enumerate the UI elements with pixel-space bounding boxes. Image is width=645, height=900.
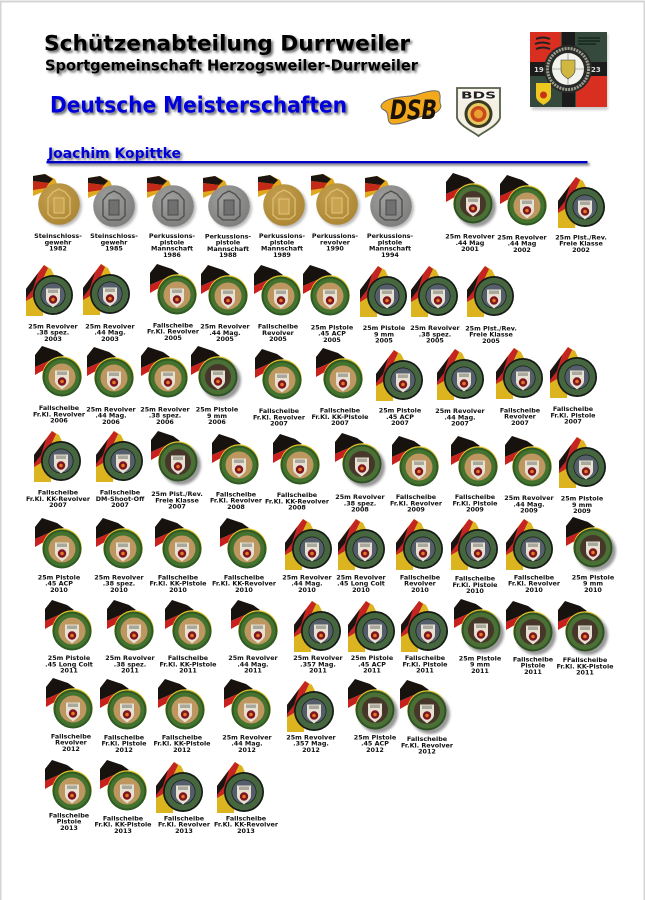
medal: Fallscheibe Fr.Kl. Pistole 2010: Fallscheibe [455,575,496,583]
medal: 25m Pistole 9 mm 2010 [566,517,616,594]
medal: 25m Pist./Rev. Freie Klasse 2002: Freie Klasse [559,240,603,248]
medal: 25m Revolver .44 Mag. 2009: .44 Mag. [513,500,545,508]
medal: Fallscheibe Fr.Kl. Pistole 2007: 2007 [564,418,582,426]
medal: Fallscheibe Fr.Kl. KK-Pistole 2013: Fallscheibe [103,814,144,822]
medal: 25m Revolver .44 Mag 2002: 2002 [513,246,531,254]
medal: Fallscheibe Revolver 2007: Fallscheibe [500,406,541,414]
medal: Fallscheibe Fr.Kl. Revolver 2007: 2007 [270,420,288,428]
medal: 25m Revolver .38 spez. 2010: 25m Revolver [94,573,145,581]
medal: 25m Revolver .38 spez. 2006: 25m Revolver [140,405,191,413]
medal: 25m Pistole .45 ACP 2012: .45 ACP [361,740,389,748]
medal: Fallscheibe Pistole 2013: 2013 [60,824,78,832]
medal: Fallscheibe Fr.Kl. KK-Pistole 2013 [94,760,152,835]
medal: 25m Pist./Rev. Freie Klasse 2005: 2005 [482,337,500,345]
medal: Fallscheibe Fr.Kl. Pistole 2010 [451,519,498,595]
medal: Perkussionspistole Mannschaft 1988: 1988 [219,251,237,259]
medal: Fallscheibe Fr.Kl. Revolver 2010: 2010 [525,586,543,594]
medal: 25m Revolver .44 Mag 2002: .44 Mag [508,240,537,248]
medal: Fallscheibe Fr.Kl. KK-Pistole 2012 [153,679,211,754]
medal: 25m Revolver .38 spez. 2008: .38 spez. [344,499,376,507]
medal: 25m Pistole .45 ACP 2011 [348,601,395,675]
medal: Steinschlossgewehr 1982: gewehr [45,238,72,246]
medal: 25m Pistole .45 ACP 2007: 2007 [391,419,409,427]
medal: 25m Pistole .45 ACP 2007: .45 ACP [386,413,414,421]
medal: 25m Pistole 9 mm 2009: 9 mm [572,501,592,509]
medal: FFallscheibe Fr.Kl. KK-Pistole 2011 [556,601,614,677]
medal: Perkussionspistole Mannschaft 1986: Perkussions- [149,232,195,240]
medal: 25m Revolver .44 Mag. 2012: 2012 [238,746,256,754]
medal: Perkussionspistole Mannschaft 1989 [258,175,307,259]
medal: 25m Pistole 9 mm 2011 [454,599,504,675]
medal: Steinschlossgewehr 1985: Steinschloss- [90,232,138,240]
medal: 25m Pist./Rev. Freie Klasse 2007: Freie Klasse [155,496,199,504]
medal: 25m Revolver .44 Mag. 2003 [83,264,136,343]
medal: Fallscheibe Fr.Kl. KK-Revolver 2013 [214,762,279,835]
medal: Fallscheibe Pistole 2011: Fallscheibe [513,655,554,663]
medal: Fallscheibe Fr.Kl. Pistole 2012: Fallscheibe [104,733,145,741]
medal: 25m Pist./Rev. Freie Klasse 2007 [151,431,203,511]
medal: Fallscheibe Revolver 2012: 2012 [62,745,80,753]
medal: 25m Pistole .45 ACP 2011: 25m Pistole [351,654,394,662]
medal: Fallscheibe Fr.Kl. KK-Pistole 2012: Fr.Kl. KK-Pistole [153,740,211,748]
medal: Fallscheibe Fr.Kl. Pistole 2009: Fallscheibe [455,493,496,501]
medal: 25m Revolver .38 spez. 2005: .38 spez. [419,330,451,338]
medal: Fallscheibe Fr.Kl. Revolver 2005: Fallscheibe [153,321,194,329]
medal: 25m Revolver .38 spez. 2010: .38 spez. [103,580,135,588]
medal: 25m Pistole .45 ACP 2012: 25m Pistole [354,733,397,741]
medal: 25m Pistole .45 ACP 2007: 25m Pistole [379,407,422,415]
title: Schützenabteilung Durrweiler [44,32,410,56]
medal: Fallscheibe Fr.Kl. Revolver 2013 [156,762,211,835]
medal: Fallscheibe Fr.Kl. KK-Revolver 2008: Fr.Kl. KK-Revolver [265,497,330,505]
medal: 25m Pistole .45 Long Colt 2011: 25m Pistole [48,654,91,662]
medal: 25m Pistole .45 ACP 2005: .45 ACP [318,330,346,338]
medal: Fallscheibe Fr.Kl. KK-Pistole 2011: Fallscheibe [168,654,209,662]
medal: 25m Revolver .44 Mag 2001: .44 Mag [456,239,485,247]
medal: Perkussionsrevolver 1990: revolver [320,238,351,246]
medal: Fallscheibe Fr.Kl. Pistole 2009 [451,436,498,514]
subtitle: Sportgemeinschaft Herzogsweiler-Durrweiler [45,56,419,74]
medal: FFallscheibe Fr.Kl. KK-Pistole 2011: Fr.Kl. KK-Pistole [556,662,614,670]
medal: Perkussionspistole Mannschaft 1994: pistole [378,238,403,246]
medal: 25m Pist./Rev. Freie Klasse 2005 [465,266,517,345]
medal: 25m Pistole .45 ACP 2007 [376,350,423,427]
divider line [46,161,588,163]
medal: Fallscheibe Fr.Kl. Pistole 2011: 2011 [416,667,434,675]
medal: Fallscheibe Fr.Kl. KK-Revolver 2007: Fr.Kl. KK-Revolver [26,495,91,503]
medal: Fallscheibe Fr.Kl. Revolver 2005: Fr.Kl. Revolver [147,328,200,336]
logo: club flag [530,32,608,110]
medal: 25m Revolver .44 Mag. 2010: 25m Revolver [282,573,333,581]
medal: Fallscheibe Fr.Kl. Revolver 2006: Fallscheibe [39,404,80,412]
logo: DSB: DSB [390,95,437,126]
medal: Perkussionsrevolver 1990: 1990 [326,245,344,253]
medal: 25m Revolver .38 spez. 2005: 2005 [426,337,444,345]
medal: Fallscheibe Fr.Kl. Revolver 2008: 2008 [227,503,245,511]
medal: Fallscheibe Fr.Kl. Pistole 2011 [401,601,448,675]
medal: 25m Pistole 9 mm 2010: 9 mm [583,580,603,588]
medal: 25m Revolver .38 spez. 2011: 2011 [121,667,139,675]
heading: Deutsche Meisterschaften: Deutsche Meisterschaften [50,94,347,118]
medal: Perkussionspistole Mannschaft 1989: Mannschaft [261,245,303,253]
medal: Fallscheibe Fr.Kl. Revolver 2012: Fallscheibe [407,735,448,743]
medal: Fallscheibe Fr.Kl. Revolver 2009 [390,436,443,514]
medal: 25m Pistole .45 ACP 2005 [303,265,354,344]
medal: Fallscheibe DM-Shoot-Off 2007: 2007 [111,501,129,509]
medal: Fallscheibe DM-Shoot-Off 2007 [96,431,145,509]
medal: 25m Pistole .45 ACP 2005: 2005 [323,336,341,344]
medal: 25m Revolver .357 Mag. 2012: 25m Revolver [286,733,337,741]
medal: 25m Revolver .38 spez. 2008 [335,433,386,514]
medal: Fallscheibe Fr.Kl. Revolver 2010: Fr.Kl. Revolver [508,580,561,588]
medal: 25m Pistole 9 mm 2005: 2005 [375,337,393,345]
medal: Fallscheibe Revolver 2005: Revolver [262,329,295,337]
medal: Fallscheibe Fr.Kl. KK-Pistole 2012: Fallscheibe [162,733,203,741]
medal: 25m Revolver .45 Long Colt 2010 [336,519,387,594]
medal: 25m Revolver .357 Mag. 2012 [286,681,337,754]
medal: Fallscheibe Fr.Kl. Revolver 2009: Fallscheibe [396,493,437,501]
medal: 25m Pistole .45 ACP 2012 [348,679,398,754]
medal: 25m Revolver .38 spez. 2005 [410,266,461,345]
medal: Perkussionspistole Mannschaft 1986 [147,176,196,259]
medal: 25m Pistole 9 mm 2006: 25m Pistole [196,406,239,414]
medal: 25m Revolver .38 spez. 2003: 25m Revolver [28,322,79,330]
medal: Fallscheibe Fr.Kl. Pistole 2012: 2012 [115,746,133,754]
medal: 25m Revolver .38 spez. 2006: .38 spez. [149,412,181,420]
name heading: Joachim Kopittke [47,146,181,162]
logo: BDS shield: BDS [461,90,496,102]
medal: Fallscheibe Fr.Kl. Pistole 2007 [550,347,597,426]
medal: 25m Pistole 9 mm 2006: 9 mm [207,412,227,420]
medal: Perkussionspistole Mannschaft 1986: pistole [160,238,185,246]
medal: Fallscheibe Fr.Kl. Pistole 2011: Fr.Kl. Pistole [402,660,448,668]
medal: 25m Pistole 9 mm 2011: 25m Pistole [459,654,502,662]
medal: 25m Revolver .44 Mag 2001: 2001 [461,245,479,253]
medal: FFallscheibe Fr.Kl. KK-Pistole 2011: FFallscheibe [563,656,608,664]
medal: 25m Revolver .44 Mag. 2006: 2006 [102,418,120,426]
medal: Fallscheibe Revolver 2007: 2007 [511,419,529,427]
medal: Perkussionspistole Mannschaft 1988 [203,176,252,259]
medal: Fallscheibe Revolver 2007 [496,348,543,427]
medal: 25m Revolver .44 Mag. 2012: .44 Mag. [231,740,263,748]
medal: 25m Revolver .38 spez. 2006 [140,347,191,426]
medal: 25m Revolver .44 Mag. 2007: 2007 [451,420,469,428]
medal: Fallscheibe Fr.Kl. KK-Revolver 2007: 2007 [49,501,67,509]
medal: 25m Revolver .44 Mag. 2007 [435,349,486,428]
medal: 25m Revolver .44 Mag. 2005: 25m Revolver [200,323,251,331]
medal: 25m Pistole 9 mm 2011: 2011 [471,667,489,675]
medal: Fallscheibe Pistole 2013: Pistole [57,818,82,826]
medal: 25m Revolver .38 spez. 2008: 25m Revolver [335,493,386,501]
medal: Fallscheibe Revolver 2010: 2010 [411,586,429,594]
medal: 25m Revolver .44 Mag. 2005: .44 Mag. [209,329,241,337]
medal: Fallscheibe Revolver 2012: Fallscheibe [51,732,92,740]
medal: 25m Revolver .38 spez. 2003: .38 spez. [37,329,69,337]
medal: Perkussionsrevolver 1990: Perkussions- [312,232,358,240]
medal: Steinschlossgewehr 1985: 1985 [105,245,123,253]
medal: 25m Pistole 9 mm 2009: 2009 [573,507,591,515]
medal grid [26,173,616,835]
medal: Fallscheibe Fr.Kl. KK-Revolver 2010 [212,518,277,594]
medal: Fallscheibe Fr.Kl. KK-Revolver 2008 [265,434,330,512]
medal: Fallscheibe Fr.Kl. Revolver 2010: Fallscheibe [514,573,555,581]
medal: Steinschlossgewehr 1985 [88,176,138,253]
medal: Fallscheibe Fr.Kl. Revolver 2006: 2006 [50,417,68,425]
medal: Perkussionspistole Mannschaft 1994: Perkussions- [367,232,413,240]
medal: 25m Revolver .44 Mag. 2003: .44 Mag. [94,329,126,337]
medal: Fallscheibe Fr.Kl. KK-Pistole 2013: Fr.Kl. KK-Pistole [94,821,152,829]
medal: Perkussionspistole Mannschaft 1988: pistole [216,239,241,247]
medal: 25m Revolver .44 Mag 2002: 25m Revolver [497,233,548,241]
medal: Fallscheibe Fr.Kl. KK-Pistole 2010: 2010 [169,586,187,594]
medal: 25m Pistole .45 Long Colt 2011: 2011 [60,667,78,675]
medal: 25m Pistole 9 mm 2010: 25m Pistole [572,573,615,581]
medal: 25m Pistole .45 ACP 2010: 25m Pistole [38,573,81,581]
medal: 25m Revolver .44 Mag. 2011 [228,600,279,675]
medal: Fallscheibe Fr.Kl. KK-Pistole 2011: 2011 [179,667,197,675]
medal: 25m Pistole .45 ACP 2010: .45 ACP [45,580,73,588]
medal: 25m Pistole .45 ACP 2010 [35,518,82,594]
medal: 25m Pistole .45 ACP 2010: 2010 [50,586,68,594]
medal: 25m Revolver .44 Mag. 2006: .44 Mag. [95,412,127,420]
medal: Fallscheibe Revolver 2010 [396,519,443,594]
medal: Fallscheibe Fr.Kl. KK-Pistole 2007: 2007 [331,419,349,427]
medal: Fallscheibe Fr.Kl. Revolver 2013: 2013 [175,827,193,835]
medal: Perkussionspistole Mannschaft 1994: Mannschaft [369,245,411,253]
medal: Fallscheibe Fr.Kl. KK-Pistole 2007 [311,348,369,427]
medal: 25m Pist./Rev. Freie Klasse 2002: 2002 [572,246,590,254]
medal: Perkussionspistole Mannschaft 1988: Perkussions- [205,232,251,240]
medal: 25m Revolver .44 Mag. 2007: .44 Mag. [444,413,476,421]
medal: 25m Revolver .38 spez. 2011: 25m Revolver [105,654,156,662]
medal: Fallscheibe Fr.Kl. Pistole 2009: Fr.Kl. Pistole [452,499,498,507]
medal: Fallscheibe Pistole 2011: 2011 [524,668,542,676]
medal: 25m Revolver .44 Mag. 2010 [282,519,333,594]
medal: FFallscheibe Fr.Kl. KK-Pistole 2011: 2011 [576,669,594,677]
medal: 25m Revolver .45 Long Colt 2010: .45 Long Colt [337,580,385,588]
medal: 25m Pistole 9 mm 2005: 9 mm [374,330,394,338]
medal: Fallscheibe Fr.Kl. Revolver 2006: Fr.Kl. Revolver [33,410,86,418]
medal: Fallscheibe Fr.Kl. Pistole 2009: 2009 [466,506,484,514]
medal: 25m Revolver .44 Mag. 2009: 25m Revolver [504,494,555,502]
medal: Fallscheibe Fr.Kl. Pistole 2010: Fr.Kl. Pistole [452,581,498,589]
logo: club flag: 23 [591,66,601,74]
medal: 25m Revolver .357 Mag. 2011: 2011 [309,667,327,675]
medal: 25m Pist./Rev. Freie Klasse 2002: 25m Pist./Rev. [555,233,607,241]
medal: Perkussionspistole Mannschaft 1989: 1989 [273,251,291,259]
medal: 25m Revolver .38 spez. 2011: .38 spez. [114,660,146,668]
logo: BDS shield [457,88,500,136]
medal: Perkussionspistole Mannschaft 1986: 1986 [163,251,181,259]
medal: 25m Revolver .38 spez. 2005: 25m Revolver [410,324,461,332]
medal: 25m Pistole .45 Long Colt 2011: .45 Long Colt [45,660,93,668]
medal: Fallscheibe Fr.Kl. KK-Revolver 2007: Fallscheibe [38,489,79,497]
medal: 25m Revolver .44 Mag. 2010: .44 Mag. [291,580,323,588]
medal: Perkussionspistole Mannschaft 1988: Mannschaft [207,245,249,253]
medal: Fallscheibe Fr.Kl. Revolver 2007: Fr.Kl. Revolver [253,413,306,421]
medal: 25m Pist./Rev. Freie Klasse 2007: 2007 [168,503,186,511]
medal: 25m Revolver .38 spez. 2008: 2008 [351,506,369,514]
medal: 25m Pistole 9 mm 2006 [191,346,241,426]
medal: Fallscheibe Fr.Kl. Pistole 2007: Fr.Kl. Pistole [550,411,596,419]
medal: Fallscheibe Pistole 2013 [45,760,92,832]
medal: Fallscheibe Fr.Kl. Revolver 2005: 2005 [164,334,182,342]
medal: 25m Revolver .38 spez. 2003 [26,265,79,343]
medal: 25m Revolver .44 Mag. 2011: 25m Revolver [228,654,279,662]
medal: 25m Pistole 9 mm 2005: 25m Pistole [363,324,406,332]
medal: 25m Pistole 9 mm 2005 [360,266,407,345]
medal: 25m Revolver .44 Mag. 2012 [222,679,273,754]
medal: Steinschlossgewehr 1982: 1982 [49,245,67,253]
medal: Fallscheibe Fr.Kl. Revolver 2013: Fallscheibe [164,814,205,822]
medal: 25m Revolver .357 Mag. 2012: .357 Mag. [293,740,329,748]
medal: Fallscheibe Fr.Kl. KK-Pistole 2011: Fr.Kl. KK-Pistole [159,660,217,668]
medal: 25m Revolver .44 Mag 2001 [445,173,496,253]
medal: Fallscheibe Fr.Kl. Revolver 2005 [147,264,200,342]
medal: 25m Revolver .357 Mag. 2011 [293,601,344,675]
medal: Fallscheibe Fr.Kl. KK-Revolver 2013: 2013 [237,827,255,835]
medal: Fallscheibe Pistole 2011: Pistole [521,662,546,670]
medal: Perkussionspistole Mannschaft 1989: pistole [270,238,295,246]
medal: 25m Revolver .44 Mag. 2012: 25m Revolver [222,733,273,741]
medal: 25m Pistole .45 Long Colt 2011 [45,600,93,675]
medal: 25m Revolver .44 Mag. 2009: 2009 [520,507,538,515]
medal: Perkussionspistole Mannschaft 1989: Perkussions- [259,232,305,240]
medal: Fallscheibe Fr.Kl. Pistole 2012 [100,679,147,754]
medal: 25m Revolver .44 Mag. 2005: 2005 [216,335,234,343]
medal: Perkussionspistole Mannschaft 1994 [365,176,414,259]
logo: club flag: 19 [534,66,544,74]
medal: Fallscheibe Revolver 2010: Revolver [404,580,437,588]
medal: 25m Pistole .45 ACP 2011: 2011 [363,667,381,675]
medal: 25m Revolver .38 spez. 2010 [94,518,145,594]
medal: 25m Revolver .44 Mag. 2003: 25m Revolver [85,322,136,330]
medal: Fallscheibe Fr.Kl. KK-Pistole 2011 [159,600,217,675]
medal: Fallscheibe Pistole 2011 [506,601,556,676]
medal: 25m Pist./Rev. Freie Klasse 2007: 25m Pist./Rev. [151,490,203,498]
medal: Fallscheibe Fr.Kl. Revolver 2008: Fallscheibe [216,490,257,498]
medal: 25m Revolver .44 Mag. 2006: 25m Revolver [86,405,137,413]
medal: Fallscheibe Fr.Kl. KK-Pistole 2007: Fr.Kl. KK-Pistole [311,413,369,421]
medal: 25m Revolver .357 Mag. 2011: 25m Revolver [293,654,344,662]
medal: Fallscheibe Fr.Kl. KK-Pistole 2007: Fallscheibe [320,407,361,415]
medal: Fallscheibe Fr.Kl. KK-Pistole 2012: 2012 [173,746,191,754]
medal: Fallscheibe Fr.Kl. Revolver 2007: Fallscheibe [259,407,300,415]
medal: Fallscheibe Fr.Kl. Pistole 2010: 2010 [466,587,484,595]
medal: Fallscheibe Fr.Kl. KK-Revolver 2010: Fallscheibe [224,573,265,581]
medal: 25m Pistole 9 mm 2009: 25m Pistole [561,495,604,503]
medal: Fallscheibe Revolver 2005 [254,265,301,343]
medal: 25m Pist./Rev. Freie Klasse 2005: 25m Pist./Rev. [465,324,517,332]
medal: 25m Revolver .45 Long Colt 2010: 2010 [352,586,370,594]
medal: Fallscheibe Fr.Kl. KK-Revolver 2010: 2010 [235,586,253,594]
medal: Fallscheibe Fr.Kl. Revolver 2008: Fr.Kl. Revolver [210,497,263,505]
medal: Fallscheibe Fr.Kl. KK-Revolver 2008: Fallscheibe [277,491,318,499]
medal: 25m Revolver .44 Mag. 2006 [86,347,137,426]
logo: DSB [381,91,441,126]
medal: Fallscheibe Fr.Kl. Revolver 2009: 2009 [407,506,425,514]
medal: 25m Revolver .38 spez. 2003: 2003 [44,335,62,343]
medal: Fallscheibe Fr.Kl. KK-Revolver 2013: Fr.Kl. KK-Revolver [214,821,279,829]
medal: Fallscheibe DM-Shoot-Off 2007: Fallscheibe [100,489,141,497]
medal: Steinschlossgewehr 1985: gewehr [101,238,128,246]
medal: Fallscheibe Fr.Kl. KK-Pistole 2010 [149,518,207,594]
medal: Fallscheibe Revolver 2010: Fallscheibe [400,573,441,581]
medal: 25m Revolver .357 Mag. 2011: .357 Mag. [300,660,336,668]
medal: Fallscheibe Fr.Kl. Revolver 2013: Fr.Kl. Revolver [158,821,211,829]
medal: Fallscheibe Fr.Kl. Pistole 2011: Fallscheibe [405,654,446,662]
medal: 25m Pist./Rev. Freie Klasse 2005: Freie Klasse [469,331,513,339]
medal: Fallscheibe Fr.Kl. KK-Pistole 2013: 2013 [114,827,132,835]
medal: Fallscheibe DM-Shoot-Off 2007: DM-Shoot-Off [96,495,145,503]
medal: 25m Pistole 9 mm 2009 [559,437,606,515]
medal: 25m Pistole .45 ACP 2012: 2012 [366,746,384,754]
medal: Fallscheibe Fr.Kl. Revolver 2012: Fr.Kl. Revolver [401,741,454,749]
medal: Fallscheibe Fr.Kl. Pistole 2007: Fallscheibe [553,405,594,413]
medal: Fallscheibe Fr.Kl. Revolver 2006 [33,346,86,425]
medal: Perkussionspistole Mannschaft 1986: Mannschaft [151,245,193,253]
medal: 25m Revolver .38 spez. 2010: 2010 [110,586,128,594]
medal: Fallscheibe Revolver 2012: Revolver [55,739,88,747]
medal: 25m Revolver .44 Mag. 2011: 2011 [244,667,262,675]
medal: 25m Pistole .45 ACP 2005: 25m Pistole [311,323,354,331]
medal: Fallscheibe Fr.Kl. Revolver 2009: Fr.Kl. Revolver [390,499,443,507]
medal: 25m Revolver .44 Mag. 2010: 2010 [298,586,316,594]
medal: Fallscheibe Fr.Kl. Revolver 2007 [253,349,306,428]
medal: Fallscheibe Revolver 2007: Revolver [504,413,537,421]
medal: Fallscheibe Fr.Kl. KK-Revolver 2013: Fallscheibe [226,814,267,822]
medal: Fallscheibe Fr.Kl. Revolver 2012 [400,680,454,756]
medal: Steinschlossgewehr 1982: Steinschloss- [34,232,82,240]
medal: Fallscheibe Fr.Kl. KK-Revolver 2010: Fr.Kl. KK-Revolver [212,580,277,588]
medal: 25m Revolver .44 Mag 2002 [497,175,548,254]
medal: Fallscheibe Fr.Kl. KK-Revolver 2007 [26,431,91,509]
medal: 25m Revolver .357 Mag. 2012: 2012 [302,746,320,754]
medal: 25m Pistole 9 mm 2010: 2010 [584,586,602,594]
medal: 25m Revolver .44 Mag. 2005 [200,265,251,343]
medal: Fallscheibe Fr.Kl. Revolver 2010 [506,519,561,594]
medal: 25m Pist./Rev. Freie Klasse 2002 [555,177,607,254]
medal: Fallscheibe Fr.Kl. Pistole 2012: Fr.Kl. Pistole [101,740,147,748]
medal: 25m Revolver .38 spez. 2011 [105,600,156,675]
medal: 25m Pistole 9 mm 2006: 2006 [208,418,226,426]
medal: 25m Revolver .44 Mag. 2007: 25m Revolver [435,407,486,415]
header [44,32,608,163]
medal: Fallscheibe Fr.Kl. KK-Pistole 2010: Fallscheibe [158,573,199,581]
medal: 25m Revolver .44 Mag. 2003: 2003 [101,335,119,343]
medal: 25m Pistole 9 mm 2011: 9 mm [470,661,490,669]
medal: Perkussionspistole Mannschaft 1994: 1994 [381,251,399,259]
medal: 25m Revolver .44 Mag. 2011: .44 Mag. [237,660,269,668]
medal: Fallscheibe Fr.Kl. KK-Revolver 2008: 2008 [288,504,306,512]
medal: 25m Revolver .44 Mag 2001: 25m Revolver [445,232,496,240]
medal: Fallscheibe Revolver 2012 [46,678,93,753]
medal: Fallscheibe Fr.Kl. KK-Pistole 2010: Fr.Kl. KK-Pistole [149,580,207,588]
medal: 25m Revolver .38 spez. 2006: 2006 [156,418,174,426]
medal: Fallscheibe Pistole 2013: Fallscheibe [49,811,90,819]
medal: Fallscheibe Fr.Kl. Revolver 2012: 2012 [418,748,436,756]
medal: Steinschlossgewehr 1982 [33,174,82,253]
medal: 25m Revolver .44 Mag. 2009 [504,436,555,515]
medal: Fallscheibe Revolver 2005: 2005 [269,335,287,343]
medal: 25m Revolver .45 Long Colt 2010: 25m Revolver [336,573,387,581]
medal: Fallscheibe Fr.Kl. Revolver 2008 [210,434,263,511]
medal: Perkussionsrevolver 1990 [311,174,360,253]
medal: 25m Pistole .45 ACP 2011: .45 ACP [358,660,386,668]
medal: Fallscheibe Revolver 2005: Fallscheibe [258,323,299,331]
